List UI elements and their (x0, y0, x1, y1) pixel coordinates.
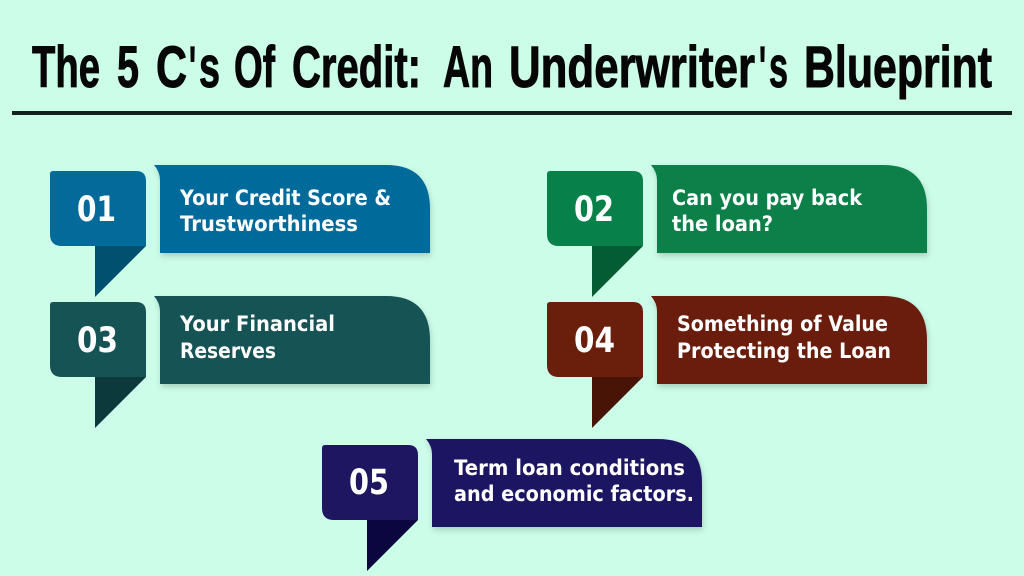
card 01: 01 (77, 190, 116, 230)
card 04 (547, 296, 927, 428)
card 04: 04 (574, 321, 615, 361)
card 03: Reserves (180, 339, 276, 363)
card 05: Term loan conditions (454, 456, 685, 480)
title: C (156, 35, 187, 100)
card 02 (547, 165, 927, 297)
card 01 (50, 165, 430, 297)
title: An (443, 35, 493, 100)
card 03: Your Financial (179, 312, 335, 336)
title (32, 35, 992, 100)
title: ' (189, 35, 196, 100)
card 05: and economic factors. (454, 482, 694, 506)
title: ' (759, 35, 766, 100)
title: Underwriter (509, 35, 755, 100)
card 05: 05 (349, 463, 389, 503)
card 05 (322, 439, 702, 571)
title: 5 (117, 35, 139, 100)
card 01: Your Credit Score & (179, 186, 391, 210)
title: Of (234, 35, 275, 100)
card 02: 02 (574, 190, 614, 230)
card 04: Protecting the Loan (677, 339, 891, 363)
card 04: Something of Value (677, 312, 888, 336)
title: The (32, 35, 100, 100)
title underline (12, 111, 1012, 115)
title: s (199, 35, 220, 100)
title: s (769, 35, 788, 100)
card 02: the loan? (672, 212, 773, 236)
card 01: Trustworthiness (180, 212, 358, 236)
card 03: 03 (77, 321, 118, 361)
card 03 (50, 296, 430, 428)
title: Credit: (292, 35, 421, 100)
card 02: Can you pay back (672, 186, 863, 210)
